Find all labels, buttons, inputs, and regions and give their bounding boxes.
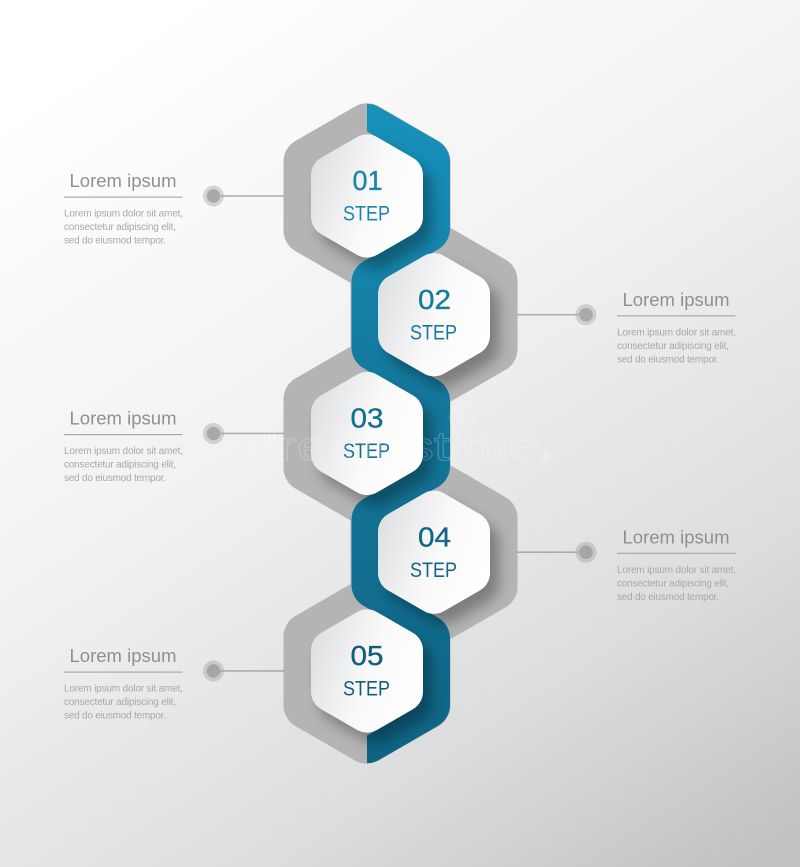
watermark: dreamstime xyxy=(247,423,540,469)
grey hexagon backing plates xyxy=(284,103,518,764)
callout 1: consectetur adipiscing elit, xyxy=(64,222,176,233)
step 01 hexagon: STEP xyxy=(343,202,390,226)
callout 3: Lorem ipsum dolor sit amet, xyxy=(64,446,183,457)
callout 2: sed do eiusmod tempor. xyxy=(617,354,719,365)
callout 4: sed do eiusmod tempor. xyxy=(617,592,719,603)
callout 1 xyxy=(64,170,284,246)
callout 3: sed do eiusmod tempor. xyxy=(64,473,166,484)
step 03 hexagon: STEP xyxy=(343,440,390,463)
step 01 hexagon xyxy=(311,134,423,258)
step 05 hexagon: 05 xyxy=(350,640,384,671)
step 04 hexagon: STEP xyxy=(410,559,457,582)
blue ribbon connecting the steps xyxy=(340,117,436,750)
hexagon cast shadows xyxy=(320,145,499,744)
step 02 hexagon xyxy=(378,253,490,376)
callout 3 xyxy=(64,408,284,484)
callout 4: Lorem ipsum dolor sit amet, xyxy=(617,565,736,576)
callout 2 xyxy=(517,289,736,365)
callout 5 xyxy=(64,645,284,722)
step 04 hexagon: 04 xyxy=(418,521,451,552)
callout 4: consectetur adipiscing elit, xyxy=(617,578,729,589)
callout 1: Lorem ipsum xyxy=(70,170,176,191)
callout 2: consectetur adipiscing elit, xyxy=(617,341,729,352)
callout 1: Lorem ipsum dolor sit amet, xyxy=(64,208,183,220)
callout 4 xyxy=(517,526,736,603)
step 02 hexagon: STEP xyxy=(410,321,457,344)
step 05 hexagon: STEP xyxy=(343,678,390,700)
step 04 hexagon xyxy=(378,491,490,614)
callout 3: consectetur adipiscing elit, xyxy=(64,460,176,470)
step 02 hexagon: 02 xyxy=(418,284,451,315)
step 05 hexagon xyxy=(311,609,423,733)
callout 5: consectetur adipiscing elit, xyxy=(64,697,176,708)
watermark xyxy=(247,405,550,469)
callout 2: Lorem ipsum dolor sit amet, xyxy=(617,327,736,338)
callout 3: Lorem ipsum xyxy=(70,408,176,428)
callout 4: Lorem ipsum xyxy=(622,526,730,547)
callout 5: sed do eiusmod tempor. xyxy=(64,710,166,722)
callout 5: Lorem ipsum xyxy=(70,645,176,666)
callout 1: sed do eiusmod tempor. xyxy=(64,236,166,246)
callout 2: Lorem ipsum xyxy=(622,289,730,310)
callout 5: Lorem ipsum dolor sit amet, xyxy=(64,684,183,694)
step 01 hexagon: 01 xyxy=(352,165,382,196)
step 03 hexagon: 03 xyxy=(350,402,384,434)
step 03 hexagon xyxy=(311,372,423,495)
